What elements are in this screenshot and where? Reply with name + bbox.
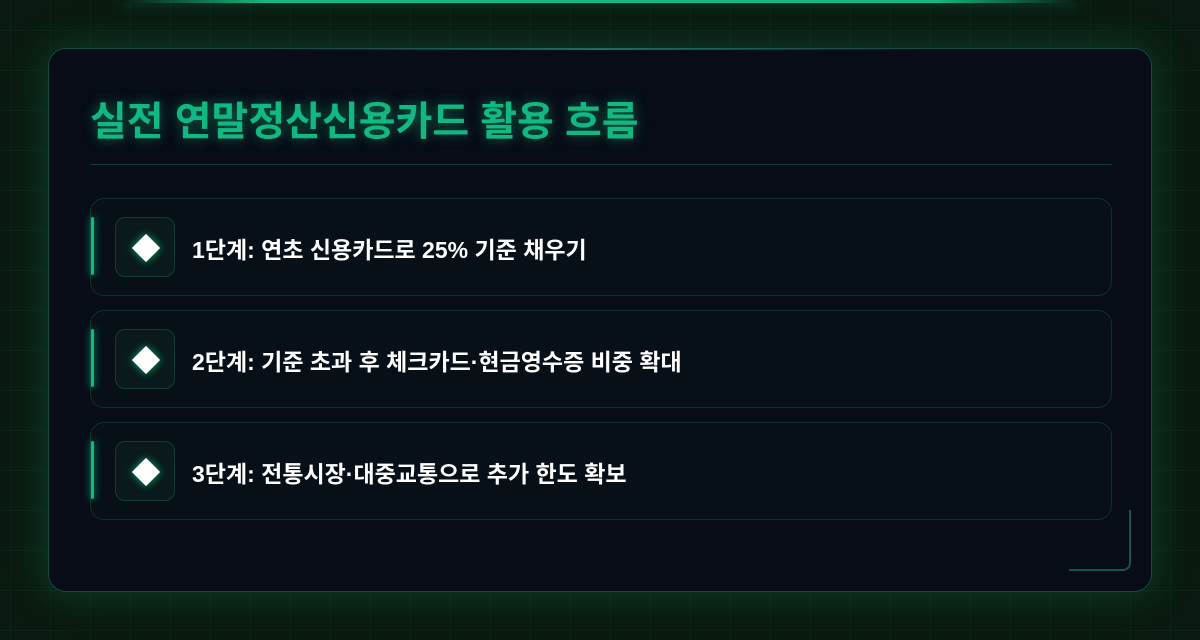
top glow bar xyxy=(120,0,1080,3)
step 3 text: 3단계: 전통시장·대중교통으로 추가 한도 확보 xyxy=(192,461,627,487)
panel: main card xyxy=(48,48,1152,592)
icon: diamond xyxy=(115,441,175,501)
step 2 xyxy=(90,310,1112,408)
icon: diamond xyxy=(115,217,175,277)
corner bracket xyxy=(1069,510,1131,571)
step 2 text: 2단계: 기준 초과 후 체크카드·현금영수증 비중 확대 xyxy=(192,349,682,375)
icon: diamond xyxy=(115,329,175,389)
title: 실전 연말정산신용카드 활용 흐름 xyxy=(90,100,639,144)
step 1 text: 1단계: 연초 신용카드로 25% 기준 채우기 xyxy=(192,237,587,263)
step 1 xyxy=(90,198,1112,296)
step 3 xyxy=(90,422,1112,520)
